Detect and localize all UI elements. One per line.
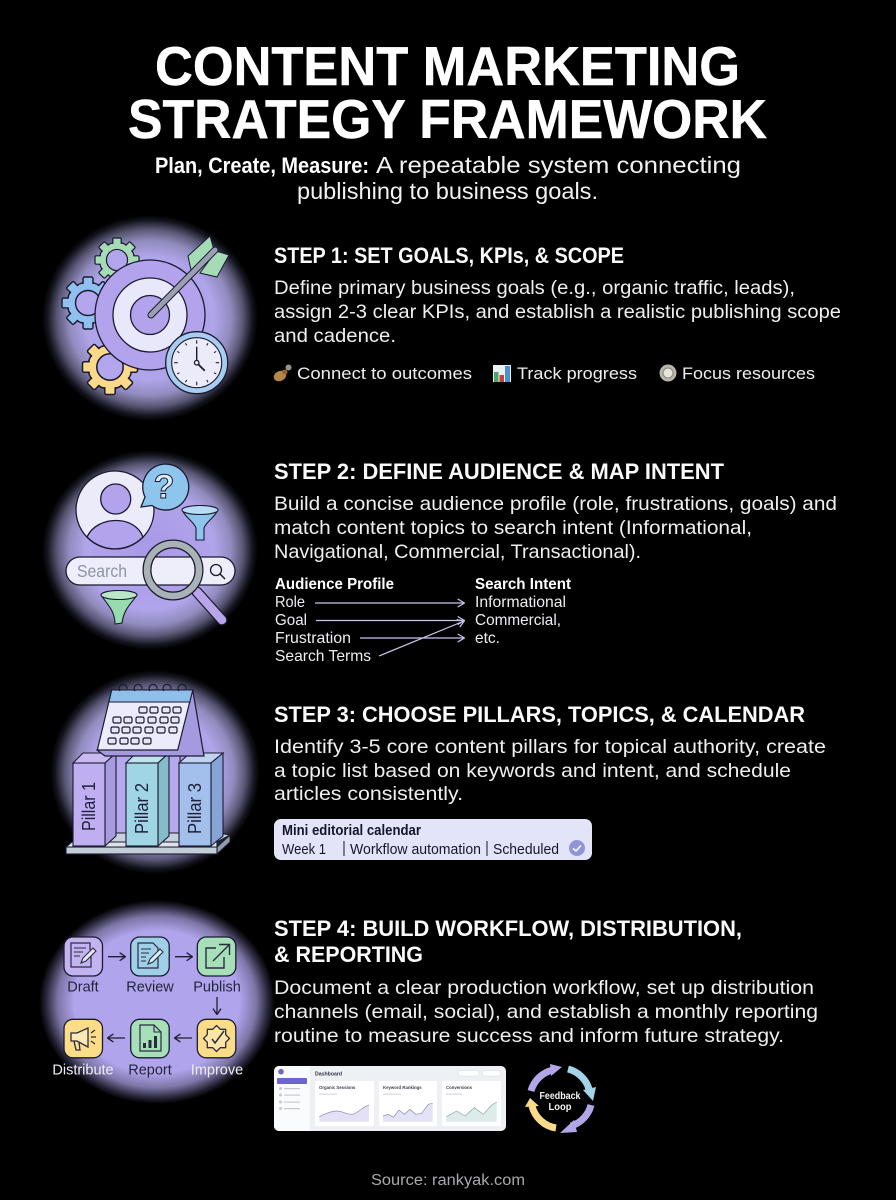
subtitle: Plan, Create, Measure: (155, 153, 369, 178)
card: keyword rankings (379, 1081, 437, 1126)
subtitle: A repeatable system connecting (376, 152, 741, 178)
step 4 body text: Document a clear production workflow, set up distribution (274, 977, 814, 999)
tile: draft: Draft (67, 980, 99, 996)
audience profile column: Search Terms (275, 648, 371, 665)
tile: report (128, 1019, 172, 1078)
step 4 heading: & REPORTING (274, 942, 423, 967)
step 4 body text: routine to measure success and inform future strategy. (274, 1025, 784, 1047)
step 1 body text: assign 2-3 clear KPIs, and establish a realistic publishing scope (274, 301, 841, 323)
audience profile column (275, 576, 394, 665)
step 1 heading: STEP 1: SET GOALS, KPIs, & SCOPE (274, 243, 624, 268)
step 1 body text (274, 277, 841, 347)
icon: scheduled check (569, 840, 585, 856)
search intent column: Commercial, (475, 612, 561, 629)
icon: audience and search: Search (77, 561, 127, 581)
title: STRATEGY FRAMEWORK (128, 88, 767, 150)
search intent column: Informational (475, 594, 566, 611)
icon: pillars and calendar: Pillar 1 (78, 782, 99, 831)
card: conversions: Conversions (446, 1085, 473, 1090)
icon: focus dial (660, 364, 676, 382)
tile: distribute: Distribute (52, 1062, 114, 1078)
tile: improve (191, 1019, 243, 1078)
step 3 body text: a topic list based on keywords and intent, and schedule (274, 760, 791, 782)
feedback loop: Feedback (540, 1091, 581, 1102)
step 1 body text: Define primary business goals (e.g., organic traffic, leads), (274, 277, 795, 299)
step 2 body text: match content topics to search intent (Informational, (274, 517, 752, 539)
icon: bar chart (493, 365, 511, 382)
tile: publish (193, 937, 241, 996)
icon: audience and search (42, 450, 258, 650)
mini editorial calendar card: Scheduled (493, 841, 559, 858)
audience profile column: Role (275, 594, 305, 611)
dashboard thumbnail (274, 1066, 506, 1131)
step 4 heading (274, 916, 742, 967)
card: conversions (442, 1081, 501, 1126)
icon: audience and search: ? (154, 468, 174, 506)
mini editorial calendar card: Week 1 (282, 841, 326, 858)
icon: target with gears and clock (42, 215, 258, 421)
step 4 body text (274, 977, 818, 1047)
workflow diagram (39, 900, 275, 1104)
subtitle: publishing to business goals. (297, 178, 598, 204)
step 4 heading: STEP 4: BUILD WORKFLOW, DISTRIBUTION, (274, 916, 742, 941)
card: organic sessions: Organic Sessions (319, 1085, 356, 1090)
feedback loop: Loop (548, 1102, 572, 1113)
icon: pillars and calendar: Pillar 2 (131, 783, 152, 834)
step 4 body text: channels (email, social), and establish a monthly reporting (274, 1001, 818, 1023)
mini editorial calendar card: Mini editorial calendar (282, 823, 421, 839)
tile: publish: Publish (193, 980, 241, 996)
step 1 body text: and cadence. (274, 325, 396, 347)
subtitle (155, 152, 741, 204)
title (128, 35, 767, 150)
workflow arrows (108, 957, 217, 1038)
dashboard thumbnail: Dashboard (315, 1072, 342, 1078)
mini editorial calendar card (274, 819, 592, 860)
step 2 heading: STEP 2: DEFINE AUDIENCE & MAP INTENT (274, 459, 725, 484)
step 3 body text: Identify 3-5 core content pillars for topical authority, create (274, 736, 826, 758)
icon: pillars and calendar: Pillar 3 (184, 783, 205, 834)
audience to intent mapping diagram (275, 576, 572, 665)
tile: review: Review (126, 980, 174, 996)
tile: report: Report (128, 1062, 172, 1078)
card: organic sessions (315, 1081, 374, 1126)
mini editorial calendar card: Workflow automation (350, 841, 481, 858)
step 2 body text (274, 493, 837, 563)
step 1 benefits row: Focus resources (682, 365, 815, 383)
step 2 body text: Navigational, Commercial, Transactional). (274, 541, 641, 563)
icon: pillars and calendar (50, 670, 260, 874)
search intent column: etc. (475, 630, 500, 647)
step 1 benefits row: Track progress (517, 365, 637, 383)
card: keyword rankings: Keyword Rankings (383, 1085, 422, 1090)
audience profile column: Audience Profile (275, 576, 394, 593)
step 3 body text: articles consistently. (274, 783, 463, 805)
step 3 body text (274, 736, 826, 805)
title: CONTENT MARKETING (155, 35, 740, 97)
mapping arrows (315, 603, 464, 656)
search intent column: Search Intent (475, 576, 572, 593)
step 1 benefits row: Connect to outcomes (297, 365, 472, 383)
audience profile column: Frustration (275, 630, 351, 647)
step 3 heading: STEP 3: CHOOSE PILLARS, TOPICS, & CALENDAR (274, 702, 805, 727)
icon: money bag (272, 364, 292, 383)
search intent column (475, 576, 572, 647)
source credit: Source: rankyak.com (371, 1172, 525, 1189)
tile: review (126, 937, 174, 996)
feedback loop (525, 1064, 596, 1133)
tile: improve: Improve (191, 1062, 243, 1078)
step 2 body text: Build a concise audience profile (role, frustrations, goals) and (274, 493, 837, 515)
tile: draft (64, 937, 102, 996)
audience profile column: Goal (275, 612, 307, 629)
step 1 benefits row (272, 364, 815, 383)
tile: distribute (52, 1019, 114, 1078)
